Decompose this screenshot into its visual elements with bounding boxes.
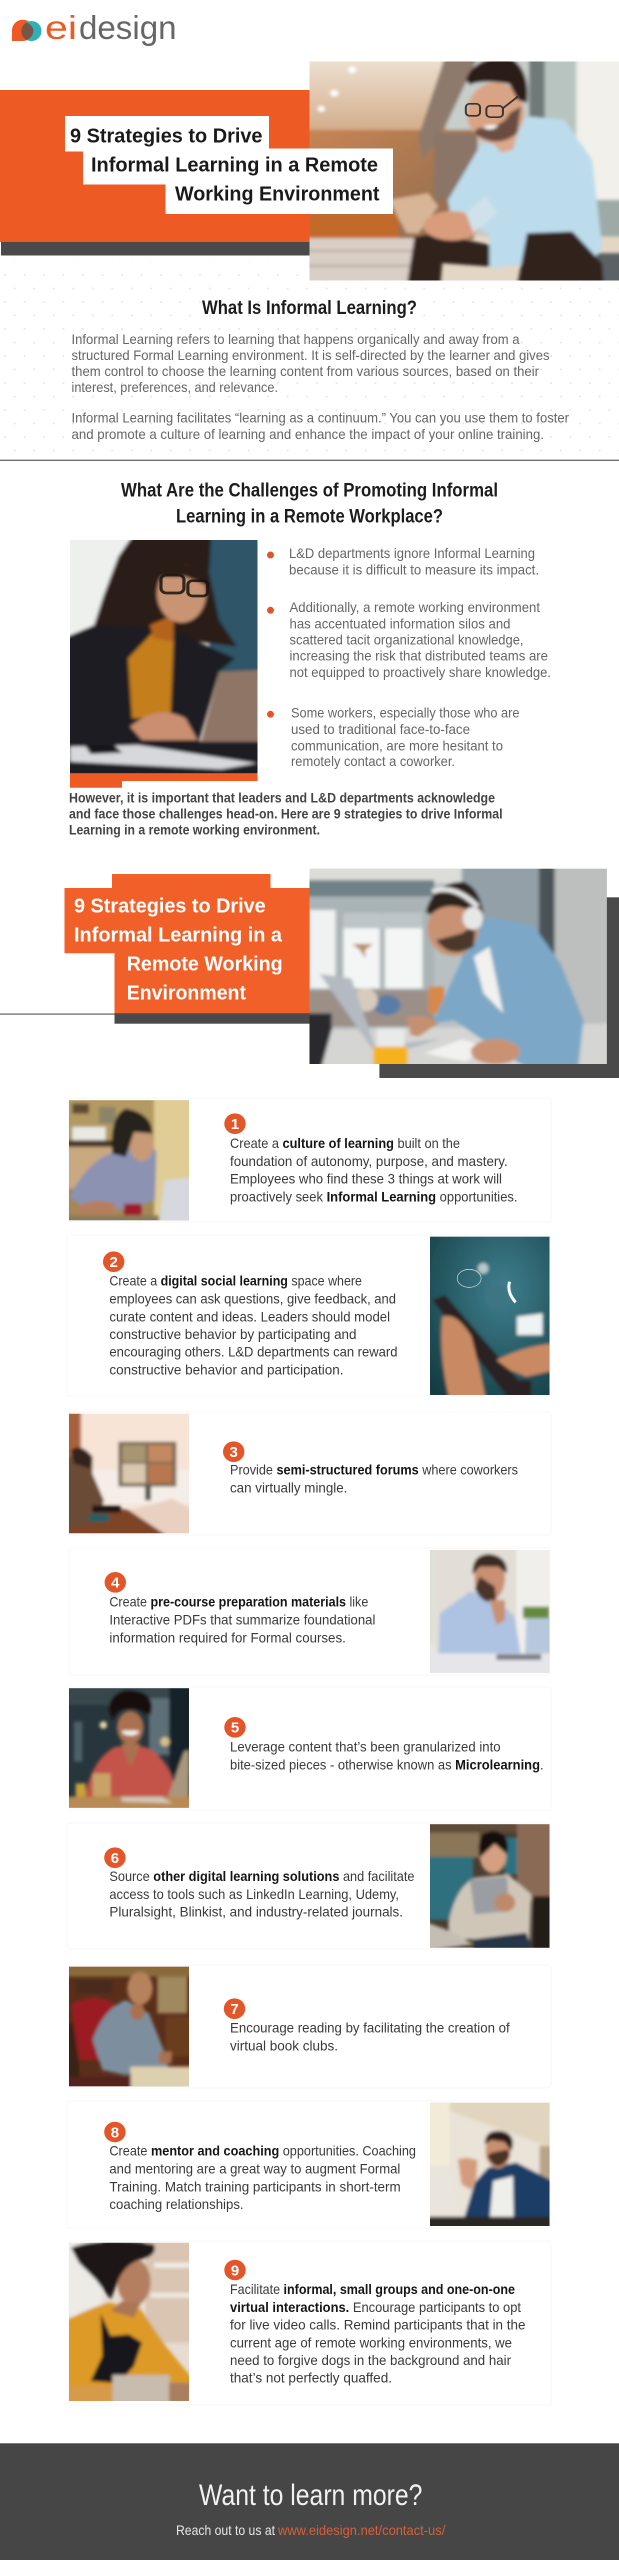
list: challenges bullets	[267, 545, 551, 769]
photo: man waving on video call	[430, 2102, 550, 2226]
strategy 1 text: Create a culture of learning built on the	[230, 1135, 460, 1151]
number badge 5: 5	[231, 1720, 239, 1737]
text block: definition: structured Formal Learning environment. It is self-directed by the learner and gives	[72, 347, 550, 363]
title: Working Environment	[175, 183, 380, 206]
text block: definition: and promote a culture of learning and enhance the impact of your online training.	[72, 426, 544, 442]
strategy 3 text: Provide semi-structured forums where coworkers	[230, 1462, 518, 1478]
text block: transition statement: Learning in a remote working environment.	[69, 822, 320, 838]
strategy 4 text	[109, 1594, 375, 1645]
text block: definition	[72, 331, 569, 442]
strategy 7 text: virtual book clubs.	[230, 2038, 338, 2054]
strategy 9 text: Facilitate informal, small groups and one-on-one	[230, 2281, 515, 2297]
number badge 1: 1	[231, 1116, 239, 1133]
bullet 3: used to traditional face-to-face	[291, 721, 470, 737]
bullet 3: Some workers, especially those who are	[291, 705, 520, 721]
panel: strategies banner heading: Informal Learning in a	[74, 924, 283, 947]
footer contact line	[176, 2522, 445, 2538]
photo: woman with small dog	[69, 2242, 189, 2401]
logo: eidesign	[12, 9, 177, 46]
bullet 3: communication, are more hesitant to	[291, 737, 503, 753]
number badge 2: 2	[110, 1254, 118, 1271]
number badge 7: 7	[230, 2001, 239, 2018]
bullet 1	[267, 545, 539, 577]
panel: strategies banner heading: 9 Strategies to Drive	[74, 894, 266, 917]
number badge 7	[224, 1998, 245, 2019]
panel: hero banner background	[0, 90, 310, 256]
heading: what is informal learning: What Is Informal Learning?	[202, 298, 417, 319]
strategy 2 text: curate content and ideas. Leaders should model	[109, 1308, 390, 1324]
strategy 6 text: access to tools such as LinkedIn Learning, Udemy,	[109, 1886, 399, 1902]
strategy 3	[62, 1407, 551, 1540]
strategy 6 text: Source other digital learning solutions and facilitate	[109, 1868, 415, 1884]
strategy 2 text: constructive behavior by participating and	[109, 1326, 357, 1342]
panel: footer call to action	[0, 2443, 619, 2560]
heading: challenges	[121, 481, 498, 527]
strategy 6 text	[109, 1868, 415, 1920]
bullet 2: Additionally, a remote working environment	[290, 599, 540, 615]
footer heading: Want to learn more?	[199, 2479, 422, 2512]
bullet 2: scattered tacit organizational knowledge,	[290, 632, 524, 648]
number badge 3	[223, 1441, 244, 1462]
text block: definition: them control to choose the learning content from various sources, based on their	[72, 363, 539, 379]
strategy 2 text: constructive behavior and participation.	[109, 1361, 344, 1377]
strategy 4 text: Create pre-course preparation materials like	[109, 1594, 368, 1610]
footer contact line: Reach out to us at	[176, 2522, 275, 2538]
text block: transition statement	[69, 789, 502, 838]
strategy 4 text: information required for Formal courses.	[109, 1629, 346, 1645]
photo: man reading in library	[69, 1966, 189, 2086]
heading: challenges: Learning in a Remote Workplace?	[176, 506, 443, 527]
title: 9 Strategies to Drive	[70, 125, 262, 148]
strategy 9 text: virtual interactions. Encourage participants to opt	[230, 2299, 521, 2315]
photo: thoughtful man at laptop	[430, 1550, 550, 1673]
text block: definition: Informal Learning facilitates “learning as a continuum.” You can you use them to foster	[72, 410, 569, 426]
strategy 9 text: that’s not perfectly quaffed.	[230, 2370, 392, 2386]
photo: video conference on monitor	[69, 1414, 189, 1534]
strategy 9 text: for live video calls. Remind participants that in the	[230, 2317, 526, 2333]
strategy 1 text: foundation of autonomy, purpose, and mastery.	[230, 1153, 508, 1169]
footer contact line: www.eidesign.net/contact-us/	[277, 2522, 445, 2538]
strategy 2 text: encouraging others. L&D departments can reward	[109, 1344, 398, 1360]
number badge 5	[224, 1717, 246, 1738]
number badge 2	[103, 1251, 124, 1272]
logo: eidesign: design	[79, 9, 176, 46]
strategy 2 text: Create a digital social learning space where	[109, 1273, 362, 1289]
bullet 3	[267, 705, 520, 769]
strategy 4 text: Interactive PDFs that summarize foundational	[109, 1612, 375, 1628]
strategy 8 text: Create mentor and coaching opportunities. Coaching	[109, 2143, 416, 2159]
number badge 4: 4	[111, 1575, 120, 1592]
strategy 8 text: coaching relationships.	[109, 2196, 244, 2212]
panel: strategies banner heading	[64, 874, 310, 1013]
logo: eidesign: ei	[45, 9, 77, 46]
strategy 7 text	[230, 2020, 510, 2054]
strategy 1	[62, 1094, 551, 1227]
number badge 4	[105, 1572, 126, 1593]
photo: hands holding phone	[430, 1236, 550, 1395]
strategy 7 text: Encourage reading by facilitating the creation of	[230, 2020, 510, 2036]
number badge 1	[224, 1113, 246, 1134]
number badge 9	[224, 2260, 246, 2280]
strategy 8	[67, 2096, 556, 2230]
photo: woman with tablet at night	[430, 1824, 550, 1948]
strategy 6 text: Pluralsight, Blinkist, and industry-related journals.	[109, 1904, 403, 1920]
strategy 8 text: Training. Match training participants in short-term	[109, 2178, 401, 2194]
bullet 2: increasing the risk that distributed teams are	[290, 648, 548, 664]
text block: transition statement: and face those challenges head-on. Here are 9 strategies to drive Informal	[69, 806, 502, 822]
photo: woman writing at desk	[69, 1100, 189, 1220]
bullet 2: has accentuated information silos and	[290, 615, 510, 631]
photo: man with tablet	[310, 62, 619, 280]
panel: strategies banner heading: Remote Working	[127, 953, 283, 976]
bullet 1: because it is difficult to measure its impact.	[289, 561, 539, 577]
strategy 2 text	[109, 1273, 398, 1377]
number badge 3: 3	[230, 1444, 238, 1461]
title: Informal Learning in a Remote	[91, 154, 378, 177]
photo: woman at laptop	[70, 540, 258, 774]
heading: challenges: What Are the Challenges of Promoting Informal	[121, 481, 498, 502]
strategy 8 text	[109, 2143, 416, 2212]
strategy 1 text: proactively seek Informal Learning opportunities.	[230, 1189, 518, 1205]
strategy 9	[62, 2236, 551, 2408]
strategy 9 text: need to forgive dogs in the background and hair	[230, 2352, 511, 2368]
text block: definition: interest, preferences, and relevance.	[72, 379, 278, 395]
strategy 3 text	[230, 1462, 518, 1496]
strategy 5 text: Leverage content that’s been granularized into	[230, 1738, 501, 1754]
bullet 2: not equipped to proactively share knowledge.	[290, 664, 551, 680]
strategy 2	[67, 1230, 556, 1402]
strategy 3 text: can virtually mingle.	[230, 1480, 347, 1496]
number badge 9: 9	[231, 2262, 239, 2279]
bullet 2	[267, 599, 551, 680]
strategy 1 text	[230, 1135, 518, 1205]
number badge 8	[104, 2122, 126, 2142]
bullet 3: remotely contact a coworker.	[291, 753, 455, 769]
bullet 1: L&D departments ignore Informal Learning	[289, 545, 535, 561]
photo accent bar	[70, 773, 258, 788]
strategy 7	[62, 1960, 551, 2090]
strategy 5	[62, 1682, 551, 1812]
photo: man with headphones	[310, 868, 607, 1064]
panel: strategies banner heading: Environment	[127, 982, 246, 1005]
panel: strategies banner shadow	[114, 897, 619, 1078]
photo: smiling woman with phone	[69, 1688, 189, 1808]
strategy 4	[69, 1543, 556, 1677]
strategy 9 text	[230, 2281, 526, 2386]
strategy 9 text: current age of remote working environments, we	[230, 2335, 512, 2351]
strategy 8 text: and mentoring are a great way to augment Formal	[109, 2161, 400, 2177]
strategy 6	[67, 1818, 557, 1953]
number badge 8: 8	[111, 2124, 119, 2141]
strategy 1 text: Employees who find these 3 things at work will	[230, 1171, 502, 1187]
strategy 2 text: employees can ask questions, give feedback, and	[109, 1291, 396, 1307]
text block: definition: Informal Learning refers to learning that happens organically and away from a	[72, 331, 520, 347]
title	[65, 116, 393, 214]
number badge 6	[104, 1847, 126, 1868]
strategy 5 text	[230, 1738, 544, 1772]
text block: transition statement: However, it is important that leaders and L&D departments acknowledge	[69, 789, 495, 805]
number badge 6: 6	[111, 1850, 119, 1867]
strategy 5 text: bite-sized pieces - otherwise known as Microlearning.	[230, 1756, 544, 1772]
